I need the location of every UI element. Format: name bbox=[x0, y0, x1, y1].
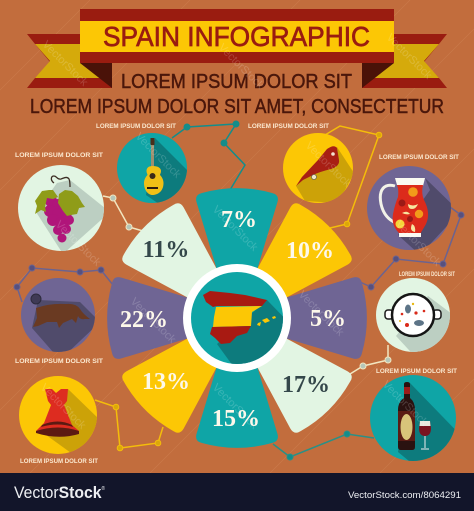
icon: paella bbox=[376, 278, 450, 352]
watermark text: VectorStock bbox=[393, 219, 443, 269]
connector: ham to 10% bbox=[325, 126, 382, 228]
connector: guitar to 7% bbox=[172, 121, 245, 190]
icon: ham bbox=[283, 133, 354, 203]
watermark text: VectorStock bbox=[384, 32, 434, 82]
petal: 17% bbox=[242, 323, 358, 439]
petal: 15%: 15% bbox=[212, 406, 260, 432]
watermark text: VectorStock bbox=[303, 140, 353, 190]
icon: wine bottle and glass bbox=[370, 375, 456, 461]
icon: grapes bbox=[18, 165, 110, 254]
watermark text: VectorStock bbox=[128, 296, 178, 346]
icon: sangria jug bbox=[367, 166, 451, 250]
label: jug: LOREM IPSUM DOLOR SIT bbox=[379, 154, 459, 161]
petal: 10% bbox=[242, 197, 358, 313]
right ribbon tail bbox=[362, 34, 447, 88]
connector: paella to 17% bbox=[350, 345, 391, 374]
label: grapes: LOREM IPSUM DOLOR SIT bbox=[15, 152, 103, 159]
title banner bbox=[27, 9, 447, 88]
petal: 7% bbox=[196, 188, 278, 270]
label: dress: LOREM IPSUM DOLOR SIT bbox=[20, 458, 98, 465]
watermark text: VectorStock bbox=[210, 382, 260, 432]
connector: wine to 15% bbox=[273, 431, 374, 460]
footer bar bbox=[0, 473, 474, 511]
label: guitar: LOREM IPSUM DOLOR SIT bbox=[96, 123, 176, 130]
watermark text: VectorStock bbox=[53, 219, 103, 269]
subtitle line 1: LOREM IPSUM DOLOR SIT bbox=[121, 71, 352, 93]
petal: 17%: 17% bbox=[282, 372, 330, 398]
left ribbon tail bbox=[27, 34, 112, 88]
watermark text: VectorStock bbox=[296, 289, 346, 339]
label: ham: LOREM IPSUM DOLOR SIT bbox=[248, 123, 329, 130]
connector: dress to 13% bbox=[95, 400, 163, 451]
watermark text: VectorStock bbox=[210, 204, 260, 254]
watermark text: VectorStock bbox=[380, 379, 430, 429]
petal: 22% bbox=[107, 277, 189, 359]
label: bull: LOREM IPSUM DOLOR SIT bbox=[15, 358, 103, 365]
petal: 5%: 5% bbox=[310, 306, 346, 332]
petal: 13% bbox=[116, 323, 232, 439]
petal: 5% bbox=[285, 277, 367, 359]
icon: guitar bbox=[117, 133, 187, 203]
watermark text: VectorStock bbox=[133, 131, 183, 181]
petal: 11% bbox=[116, 197, 232, 313]
petal: 15% bbox=[196, 366, 278, 448]
watermark text: VectorStock bbox=[38, 382, 88, 432]
watermark text: VectorStock bbox=[40, 39, 90, 89]
petal: 13%: 13% bbox=[142, 369, 190, 395]
ribbon main band bbox=[80, 9, 394, 63]
petal chart bbox=[107, 188, 367, 448]
footer logo: VectorStock bbox=[14, 484, 104, 502]
footer logo: ® bbox=[101, 485, 105, 492]
watermark text bbox=[38, 32, 443, 432]
watermark text: VectorStock bbox=[216, 42, 266, 92]
icon: flamenco dress bbox=[19, 376, 100, 458]
connector: jug to 5% bbox=[360, 207, 464, 290]
map of Spain bbox=[203, 291, 276, 344]
center Spain map badge bbox=[183, 264, 300, 372]
petal: 7%: 7% bbox=[221, 207, 257, 233]
label: wine: LOREM IPSUM DOLOR SIT bbox=[376, 368, 457, 375]
connector: bull to 22% bbox=[14, 265, 113, 302]
connector: grapes to 11% bbox=[103, 195, 143, 231]
petal: 22%: 22% bbox=[120, 307, 168, 333]
petal: 10%: 10% bbox=[286, 238, 334, 264]
petal: 11%: 11% bbox=[143, 237, 189, 263]
icon: bull bbox=[21, 278, 95, 352]
title text: SPAIN INFOGRAPHIC bbox=[103, 21, 370, 52]
footer url: VectorStock.com/8064291 bbox=[348, 490, 461, 501]
